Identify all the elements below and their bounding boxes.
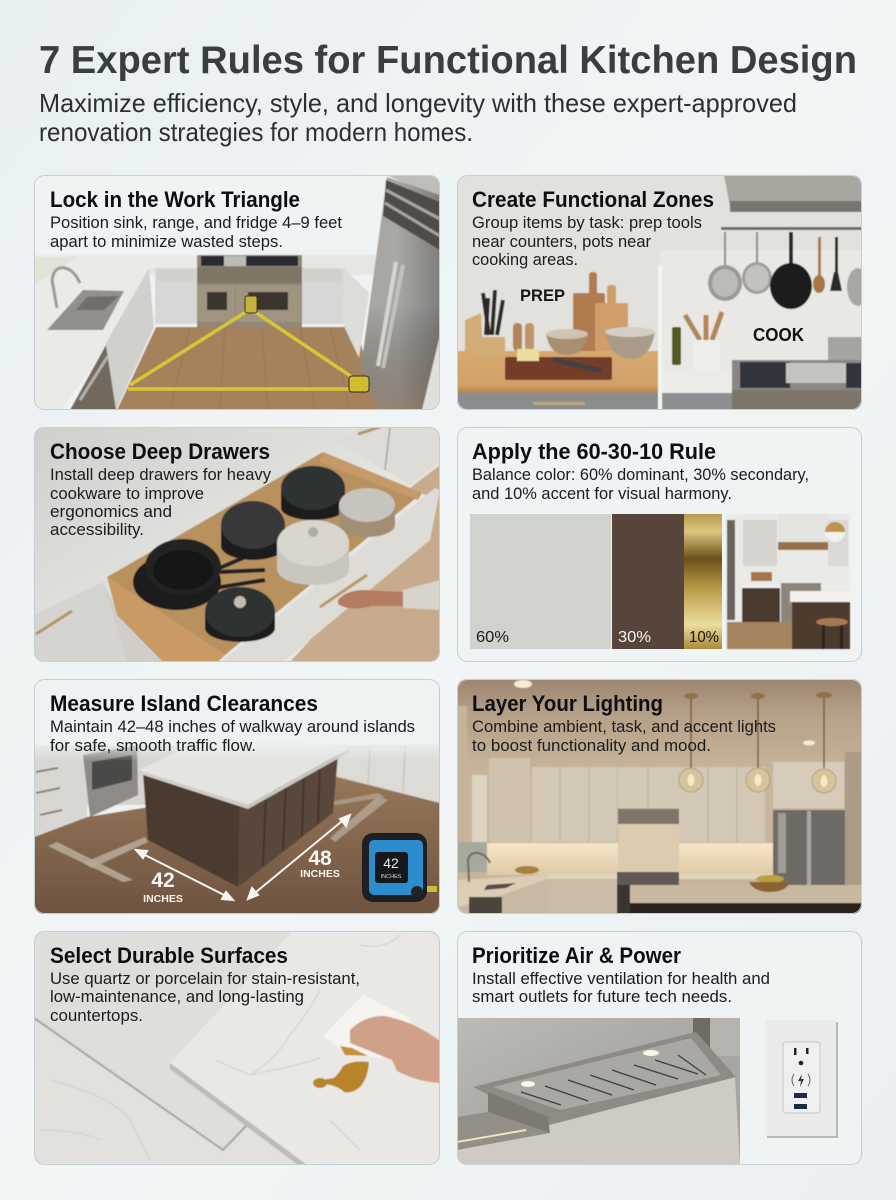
swatch: 30 percent bbox=[612, 514, 684, 649]
body text bbox=[50, 465, 271, 539]
body text bbox=[472, 213, 702, 269]
body text: countertops. bbox=[50, 1006, 143, 1025]
body text: cooking areas. bbox=[472, 250, 578, 269]
body text bbox=[472, 969, 770, 1006]
panel: functional zones bbox=[457, 175, 869, 410]
panel: durable surfaces bbox=[34, 931, 440, 1165]
icon: digital tape measure: INCHES bbox=[381, 874, 402, 880]
icon: digital tape measure: 42 bbox=[383, 855, 399, 871]
body text: Install deep drawers for heavy bbox=[50, 465, 271, 484]
swatch: 60 percent bbox=[470, 514, 611, 649]
heading: choose deep drawers: Choose Deep Drawers bbox=[50, 439, 270, 464]
heading: create functional zones: Create Functional Zones bbox=[472, 187, 714, 212]
body text: smart outlets for future tech needs. bbox=[472, 987, 732, 1006]
label: 48 inches: INCHES bbox=[300, 868, 340, 880]
label: cook: COOK bbox=[753, 325, 804, 345]
body text: accessibility. bbox=[50, 520, 144, 539]
body text: apart to minimize wasted steps. bbox=[50, 232, 283, 251]
subtitle: renovation strategies for modern homes. bbox=[39, 117, 473, 147]
subtitle bbox=[39, 88, 797, 147]
swatch: 30 percent: 30% bbox=[618, 629, 651, 646]
panel: deep drawers bbox=[34, 427, 440, 662]
title: 7 Expert Rules for Functional Kitchen Design bbox=[39, 39, 857, 82]
label: 42 inches: INCHES bbox=[143, 893, 183, 905]
body text bbox=[472, 465, 809, 503]
body text: ergonomics and bbox=[50, 502, 172, 521]
body text bbox=[50, 213, 342, 251]
label: 42 inches: 42 bbox=[151, 869, 175, 892]
label: 48 inches: 48 bbox=[308, 847, 332, 870]
body text: to boost functionality and mood. bbox=[472, 736, 711, 755]
swatch: 60 percent: 60% bbox=[476, 629, 509, 646]
body text: near counters, pots near bbox=[472, 232, 651, 251]
body text: Maintain 42–48 inches of walkway around islands bbox=[50, 717, 415, 736]
panel: layer lighting bbox=[457, 679, 862, 914]
body text: Use quartz or porcelain for stain-resistant, bbox=[50, 969, 360, 988]
heading: apply the 60-30-10 rule: Apply the 60-30-10 Rule bbox=[472, 439, 716, 464]
icon: digital tape measure bbox=[362, 833, 437, 902]
body text: cookware to improve bbox=[50, 484, 204, 503]
panel: work triangle bbox=[34, 175, 440, 410]
panel: island clearances bbox=[34, 679, 440, 914]
swatch: 10 percent bbox=[684, 514, 722, 649]
body text: low-maintenance, and long-lasting bbox=[50, 987, 304, 1006]
icon: smart outlet bbox=[765, 1020, 838, 1138]
body text bbox=[50, 717, 415, 755]
body text: Install effective ventilation for health and bbox=[472, 969, 770, 988]
body text: Combine ambient, task, and accent lights bbox=[472, 717, 776, 736]
measuring tape triangle bbox=[128, 296, 369, 392]
heading: prioritize air and power: Prioritize Air & Power bbox=[472, 943, 681, 968]
body text: Group items by task: prep tools bbox=[472, 213, 702, 232]
subtitle: Maximize efficiency, style, and longevity with these expert-approved bbox=[39, 88, 797, 118]
body text: Balance color: 60% dominant, 30% secondary, bbox=[472, 465, 809, 484]
heading: lock in the work triangle: Lock in the Work Triangle bbox=[50, 187, 300, 212]
panel: air and power bbox=[457, 931, 862, 1165]
body text: and 10% accent for visual harmony. bbox=[472, 484, 732, 503]
label: 42 inches bbox=[143, 869, 183, 905]
arrow: 42 inches bbox=[136, 850, 233, 900]
body text: Position sink, range, and fridge 4–9 feet bbox=[50, 213, 342, 232]
swatch: 10 percent: 10% bbox=[689, 629, 719, 646]
heading: measure island clearances: Measure Island Clearances bbox=[50, 691, 318, 716]
kitchen photo bbox=[726, 514, 850, 649]
arrow: 48 inches bbox=[248, 815, 350, 899]
label: 48 inches bbox=[300, 847, 340, 880]
label: prep: PREP bbox=[520, 286, 565, 305]
heading: select durable surfaces: Select Durable Surfaces bbox=[50, 943, 288, 968]
heading: layer your lighting: Layer Your Lighting bbox=[472, 691, 663, 716]
body text: for safe, smooth traffic flow. bbox=[50, 736, 256, 755]
panel: 60-30-10 rule bbox=[458, 428, 862, 662]
body text bbox=[472, 717, 776, 755]
body text bbox=[50, 969, 360, 1025]
